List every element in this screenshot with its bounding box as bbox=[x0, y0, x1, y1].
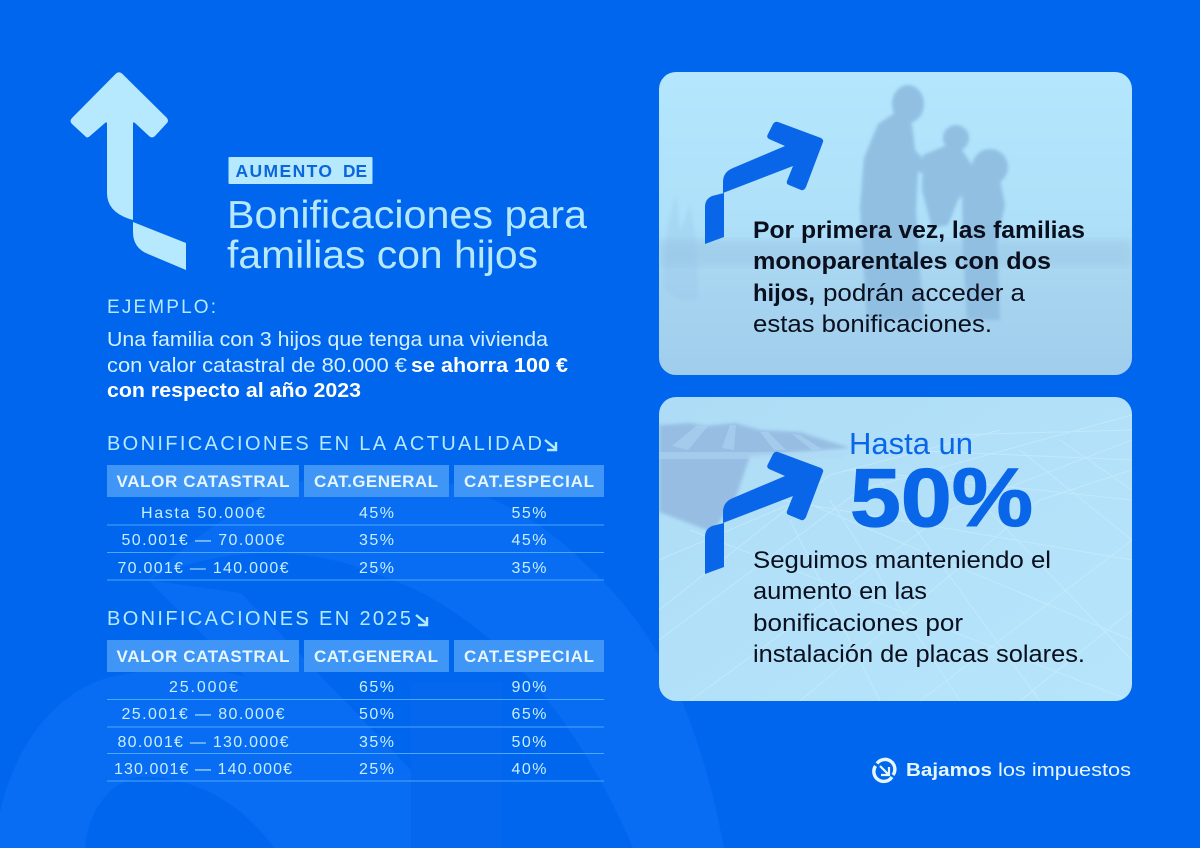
example heading: EJEMPLO: bbox=[107, 297, 216, 318]
panel text: estas bonificaciones. bbox=[753, 311, 992, 338]
icon: arrow bbox=[705, 452, 823, 574]
table: 2025: 50% bbox=[359, 706, 394, 723]
table: 2025 bbox=[107, 640, 604, 781]
example text: con respecto al año 2023 bbox=[107, 379, 361, 402]
panel text bbox=[753, 547, 1085, 668]
panel text: instalación de placas solares. bbox=[753, 641, 1085, 668]
panel text: Por primera vez, las familias bbox=[753, 217, 1085, 244]
table: actualidad bbox=[107, 465, 604, 580]
example text: Una familia con 3 hijos que tenga una vivienda bbox=[107, 328, 549, 351]
example text bbox=[107, 328, 569, 402]
panel: familias monoparentales bbox=[659, 72, 1132, 375]
panel text: hijos, bbox=[753, 280, 815, 307]
table: 2025: 130.001€ — 140.000€ bbox=[114, 761, 292, 778]
tag: aumento de: DE bbox=[343, 161, 367, 181]
panel text bbox=[753, 217, 1085, 338]
tag: aumento de: AUMENTO bbox=[236, 161, 332, 181]
table: 2025: 80.001€ — 130.000€ bbox=[118, 734, 289, 751]
tag: aumento de bbox=[228, 157, 372, 184]
table: actualidad: CAT.GENERAL bbox=[314, 472, 438, 491]
panel text: monoparentales con dos bbox=[753, 248, 1051, 275]
table: 2025: 35% bbox=[359, 734, 394, 751]
table: actualidad: CAT.ESPECIAL bbox=[464, 472, 594, 491]
table: actualidad: 35% bbox=[359, 532, 394, 549]
table: 2025: 65% bbox=[512, 706, 546, 723]
example text: con valor catastral de 80.000 € bbox=[107, 354, 408, 377]
table: 2025: VALOR CATASTRAL bbox=[116, 647, 290, 666]
panel text: aumento en las bbox=[753, 578, 927, 605]
table: actualidad: 70.001€ — 140.000€ bbox=[118, 560, 289, 577]
table: actualidad: Hasta 50.000€ bbox=[141, 505, 265, 522]
table: actualidad: 50.001€ — 70.000€ bbox=[122, 532, 285, 549]
title: Bonificaciones para bbox=[227, 194, 588, 237]
table: actualidad: 45% bbox=[512, 532, 546, 549]
brand logo bbox=[874, 759, 1131, 781]
title: familias con hijos bbox=[227, 234, 538, 277]
table: actualidad: 25% bbox=[359, 560, 394, 577]
table: 2025: CAT.GENERAL bbox=[314, 647, 438, 666]
table: 2025: 25% bbox=[359, 761, 394, 778]
table: 2025: 50% bbox=[512, 734, 546, 751]
50%: 50% bbox=[850, 451, 1033, 544]
table: 2025: CAT.ESPECIAL bbox=[464, 647, 594, 666]
panel: placas solares bbox=[659, 397, 1132, 701]
table: 2025: 25.001€ — 80.000€ bbox=[122, 706, 285, 723]
panel text: podrán acceder a bbox=[823, 280, 1025, 307]
table: actualidad: 55% bbox=[512, 505, 546, 522]
table: 2025: 40% bbox=[512, 761, 546, 778]
icon: arrow bbox=[705, 122, 823, 244]
panel text: bonificaciones por bbox=[753, 610, 963, 637]
hasta un: Hasta un bbox=[849, 426, 973, 461]
infographic canvas bbox=[70, 72, 1132, 784]
table: 2025: 90% bbox=[512, 679, 546, 696]
brand logo: Bajamos bbox=[906, 759, 992, 780]
table: actualidad: VALOR CATASTRAL bbox=[116, 472, 290, 491]
main arrow icon bbox=[70, 72, 186, 270]
panel text: Seguimos manteniendo el bbox=[753, 547, 1051, 574]
brand logo: los impuestos bbox=[998, 759, 1131, 780]
background logo watermark bbox=[0, 470, 724, 848]
table: actualidad: 35% bbox=[512, 560, 546, 577]
title bbox=[227, 194, 588, 277]
table: 2025: 65% bbox=[359, 679, 394, 696]
table: 2025: 25.000€ bbox=[169, 679, 238, 696]
heading: bonificaciones en 2025: BONIFICACIONES EN 2025 bbox=[107, 608, 411, 630]
table: actualidad: 45% bbox=[359, 505, 394, 522]
example text: se ahorra 100 € bbox=[411, 354, 569, 377]
heading: bonificaciones en la actualidad: BONIFICACIONES EN LA ACTUALIDAD bbox=[107, 433, 542, 455]
